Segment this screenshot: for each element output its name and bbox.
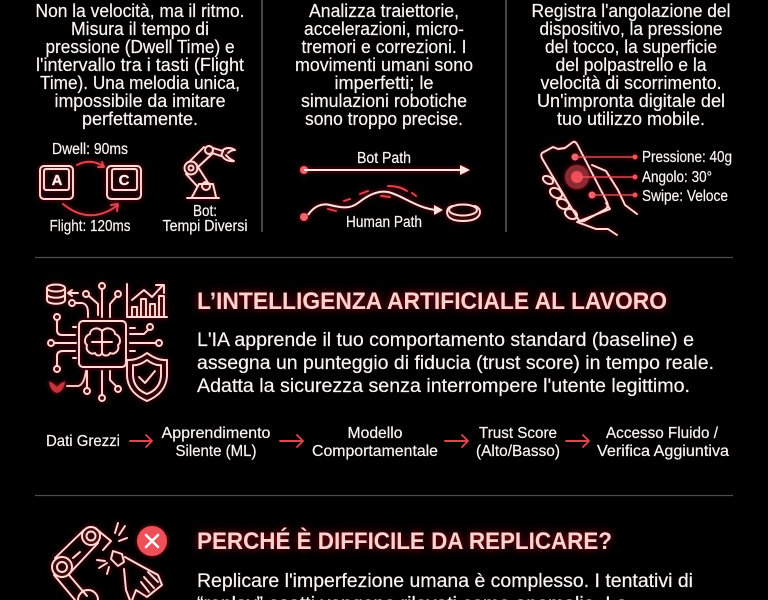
step: learning: Apprendimento <box>162 425 271 442</box>
text block: rhythm: impossibile da imitare <box>54 91 226 111</box>
step: access: Verifica Aggiuntiva <box>597 443 729 460</box>
arrow 1 <box>130 435 152 447</box>
icon: button <box>447 204 480 221</box>
step: access: Accesso Fluido / <box>606 425 719 442</box>
label: swipe: Swipe: Veloce <box>642 188 728 205</box>
text block: device: dispositivo, la pressione <box>540 19 722 39</box>
label: flight: Flight: 120ms <box>50 218 131 235</box>
label: human path: Human Path <box>346 214 422 231</box>
text block: device: del polpastrello e la <box>556 55 707 75</box>
text block: AI: L'IA apprende il tuo comportamento standard (baseline) e <box>197 330 694 351</box>
text block: device: del tocco, la superficie <box>545 37 717 57</box>
icon: keys A and C: A <box>52 172 63 189</box>
arrow 2 <box>280 435 303 447</box>
label: pressure: Pressione: 40g <box>642 149 732 166</box>
heading: AI: L’INTELLIGENZA ARTIFICIALE AL LAVORO <box>197 288 667 315</box>
icon: keys A and C <box>40 162 141 215</box>
text block: device <box>532 1 730 129</box>
heading: why hard: PERCHÉ È DIFFICILE DA REPLICARE? <box>197 527 612 555</box>
step: model <box>312 425 438 460</box>
text block: AI <box>197 330 714 397</box>
icon: X badge <box>137 526 167 556</box>
label: angle: Angolo: 30° <box>642 169 712 186</box>
step: learning: Silente (ML) <box>176 443 256 460</box>
step: trust score: Trust Score <box>479 425 557 442</box>
arrow 4 <box>566 435 589 447</box>
text block: trajectories: movimenti umani sono <box>295 55 473 75</box>
text block: trajectories: tremori e correzioni. I <box>302 37 466 57</box>
text block: trajectories: sono troppo precise. <box>305 109 463 129</box>
text block: AI: Adatta la sicurezza senza interrompere l'utente legittimo. <box>197 376 690 397</box>
icon: robot arm and human hand <box>52 523 162 600</box>
text block: rhythm: Misura il tempo di <box>71 19 209 39</box>
arrow: human path <box>300 186 443 221</box>
text block: rhythm: Time). Una melodia unica, <box>40 73 240 93</box>
text block: rhythm <box>36 1 244 129</box>
text block: trajectories <box>295 1 473 129</box>
step: access <box>597 425 729 460</box>
text block: trajectories: accelerazioni, micro- <box>304 19 464 39</box>
text block: AI: assegna un punteggio di fiducia (trust score) in tempo reale. <box>197 353 714 374</box>
label: bot times: Tempi Diversi <box>162 218 248 235</box>
text block: device: velocità di scorrimento. <box>540 73 722 93</box>
text block: why hard: Replicare l'imperfezione umana è complesso. I tentativi di <box>197 571 693 592</box>
step: model: Comportamentale <box>312 443 438 460</box>
icon: keys A and C: C <box>119 172 130 189</box>
icon: phone with hand <box>541 142 638 235</box>
step: trust score <box>476 425 560 460</box>
label: dwell: Dwell: 90ms <box>52 141 128 158</box>
text block: trajectories: simulazioni robotiche <box>301 91 467 111</box>
text block: device: Registra l'angolazione del <box>532 1 730 21</box>
icon: robot arm <box>184 146 235 198</box>
text block: rhythm: l'intervallo tra i tasti (Flight <box>36 55 244 75</box>
step: trust score: (Alto/Basso) <box>476 443 560 460</box>
step: raw data: Dati Grezzi <box>46 433 120 450</box>
text block: rhythm: Non la velocità, ma il ritmo. <box>36 1 244 21</box>
text block: device: tuo utilizzo mobile. <box>557 109 705 129</box>
label: bot: Bot: <box>193 203 217 220</box>
text block: trajectories: Analizza traiettorie, <box>309 1 459 21</box>
flow: AI pipeline <box>46 425 729 460</box>
step: model: Modello <box>348 425 403 442</box>
label: bot path: Bot Path <box>357 150 411 167</box>
step: learning <box>162 425 271 460</box>
icon: AI chip <box>47 283 167 401</box>
text block: rhythm: pressione (Dwell Time) e <box>46 37 234 57</box>
arrow 3 <box>445 435 468 447</box>
text block: device: Un'impronta digitale del <box>537 91 725 111</box>
arrow: bot path <box>300 165 470 175</box>
text block: rhythm: perfettamente. <box>82 109 198 129</box>
text block: trajectories: imperfetti; le <box>334 73 434 93</box>
